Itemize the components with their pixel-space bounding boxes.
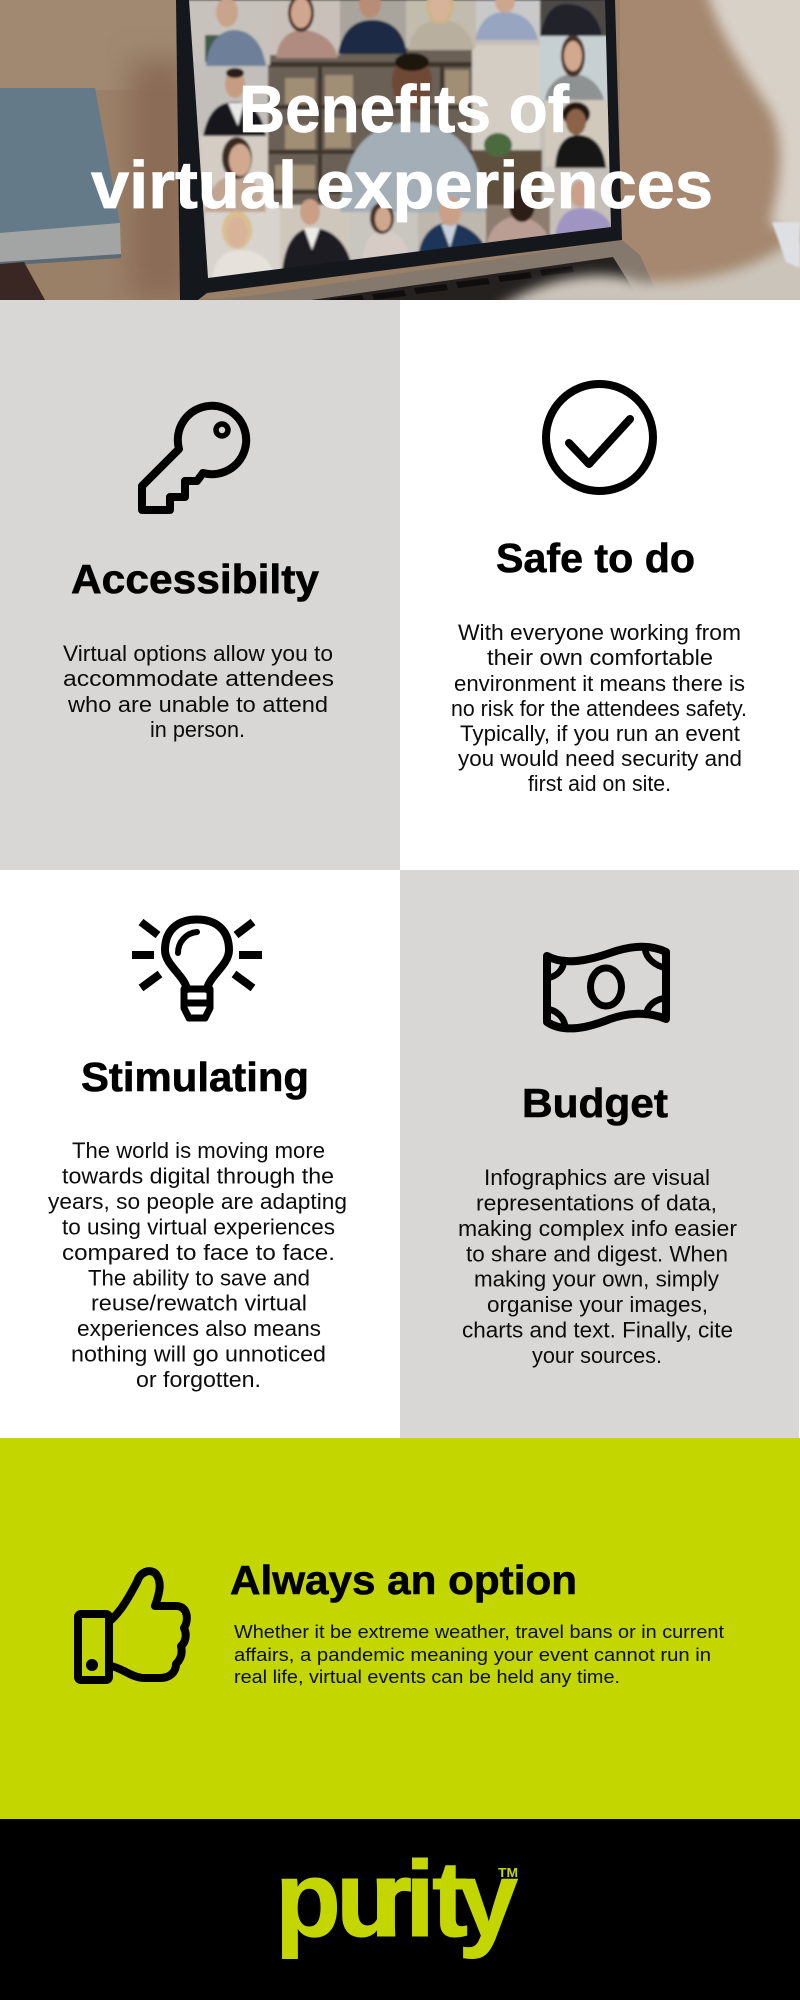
text: always an option body: affairs, a pandemic meaning your event cannot run in — [234, 1644, 711, 1665]
text: stimulating body: experiences also means — [77, 1316, 321, 1341]
logo: purity: purity — [275, 1838, 518, 1959]
text: stimulating body: The world is moving more — [72, 1138, 325, 1163]
icon: banknote — [547, 947, 666, 1028]
panel: footer — [0, 1819, 800, 2000]
text: safe to do body: With everyone working from — [458, 620, 741, 645]
text: accessibility body — [63, 641, 334, 742]
heading: stimulating: Stimulating — [81, 1054, 309, 1100]
text: budget body: to share and digest. When — [466, 1241, 728, 1266]
icon: light bulb — [132, 920, 262, 1018]
text: accessibility body: in person. — [150, 717, 245, 742]
panel: always an option — [0, 1438, 800, 1819]
hero photo: laptop video call on desk — [0, 0, 800, 310]
text: budget body: representations of data, — [476, 1190, 717, 1215]
text: safe to do body: you would need security and — [458, 746, 742, 771]
text: always an option body: real life, virtual events can be held any time. — [234, 1666, 620, 1687]
panel: accessibility — [0, 300, 400, 870]
text: budget body — [458, 1165, 737, 1368]
title: Benefits of — [239, 72, 570, 147]
text: budget body: organise your images, — [487, 1292, 708, 1317]
text: safe to do body: their own comfortable — [487, 645, 713, 670]
text: safe to do body: environment it means there is — [454, 671, 745, 696]
panel: stimulating — [0, 870, 400, 1438]
text: budget body: making complex info easier — [458, 1216, 737, 1241]
text: safe to do body: no risk for the attendees safety. — [451, 696, 747, 721]
text: accessibility body: Virtual options allow you to — [63, 641, 333, 666]
text: always an option body: Whether it be extreme weather, travel bans or in current — [234, 1621, 724, 1642]
panel: safe to do — [400, 300, 800, 870]
text: stimulating body: compared to face to face. — [62, 1240, 335, 1265]
text: stimulating body: towards digital through the — [62, 1164, 334, 1188]
icon: check mark in circle — [546, 384, 653, 491]
title: virtual experiences — [91, 148, 713, 223]
panel: budget — [400, 870, 799, 1438]
text: accessibility body: accommodate attendees — [63, 666, 334, 691]
icon: thumbs up — [78, 1571, 187, 1680]
text: stimulating body: reuse/rewatch virtual — [91, 1291, 307, 1316]
text: stimulating body: years, so people are adapting — [48, 1189, 347, 1214]
heading: accessibility: Accessibilty — [71, 556, 319, 602]
text: safe to do body — [451, 620, 747, 796]
text: stimulating body: The ability to save and — [88, 1265, 310, 1290]
text: stimulating body — [48, 1138, 347, 1392]
heading: safe to do: Safe to do — [496, 535, 695, 581]
text: stimulating body: to using virtual experiences — [62, 1214, 335, 1239]
icon: key — [142, 406, 246, 510]
text: budget body: charts and text. Finally, cite — [462, 1318, 733, 1343]
text: stimulating body: or forgotten. — [136, 1367, 261, 1392]
logo: purity: TM — [498, 1865, 518, 1880]
text: budget body: your sources. — [532, 1343, 662, 1368]
text: safe to do body: first aid on site. — [528, 771, 671, 796]
heading: always an option: Always an option — [230, 1557, 577, 1603]
text: always an option body — [234, 1621, 724, 1687]
text: stimulating body: nothing will go unnoticed — [71, 1342, 326, 1367]
text: budget body: making your own, simply — [474, 1267, 719, 1292]
text: accessibility body: who are unable to attend — [67, 692, 328, 717]
title — [91, 72, 713, 223]
text: budget body: Infographics are visual — [484, 1165, 710, 1190]
text: safe to do body: Typically, if you run an event — [460, 721, 740, 746]
heading: budget: Budget — [522, 1080, 668, 1126]
